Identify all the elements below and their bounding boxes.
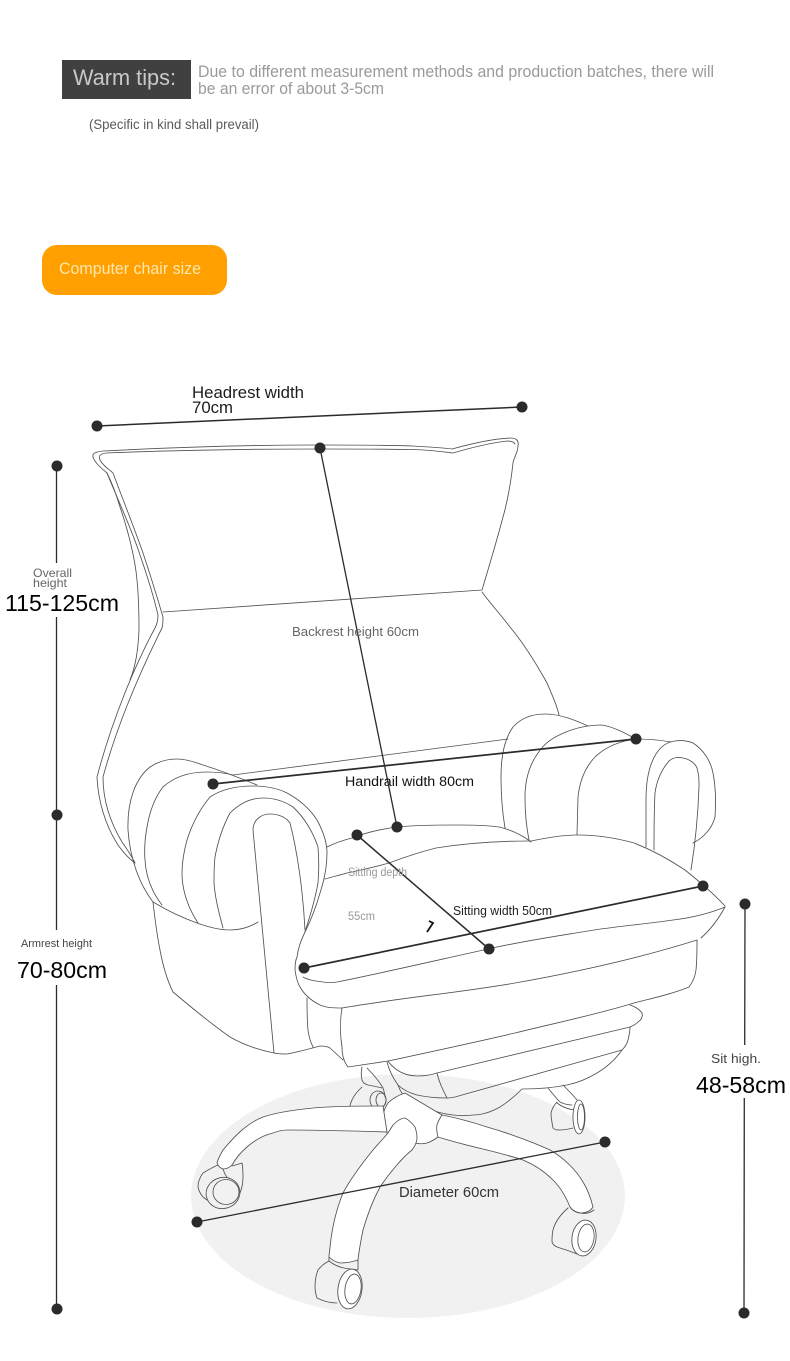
measure: sitting width: Sitting width 50cm bbox=[453, 904, 552, 918]
measure: overall height: 115-125cm bbox=[5, 590, 119, 616]
floor shadow ellipse bbox=[191, 1074, 625, 1318]
section pill: computer chair size bbox=[42, 245, 227, 295]
measure: handrail width bbox=[208, 734, 642, 790]
warm tips badge: Warm tips: bbox=[73, 65, 176, 90]
measure: backrest height: Backrest height 60cm bbox=[292, 625, 419, 639]
measure: overall height: height bbox=[33, 576, 68, 590]
measure: overall height: Overall bbox=[33, 566, 72, 580]
measure: armrest height: 70-80cm bbox=[17, 957, 107, 983]
warm tips note: be an error of about 3-5cm bbox=[198, 79, 384, 98]
measure: armrest height bbox=[17, 938, 107, 1314]
measure: headrest width: 70cm bbox=[192, 399, 233, 417]
measure: headrest width: Headrest width bbox=[192, 384, 304, 402]
measure: sitting depth: Sitting depth bbox=[348, 867, 407, 879]
measure: armrest height: Armrest height bbox=[21, 938, 92, 950]
section pill: computer chair size: Computer chair size bbox=[59, 259, 201, 278]
measure: seat height: 48-58cm bbox=[696, 1072, 786, 1098]
measure: sitting width bbox=[298, 880, 708, 974]
measure: sitting depth: 55cm bbox=[348, 911, 375, 923]
chair line drawing bbox=[93, 438, 725, 1310]
footrest bbox=[387, 1005, 642, 1116]
warm tips badge bbox=[62, 60, 191, 99]
back casters bbox=[350, 1067, 585, 1134]
measure: seat height: Sit high. bbox=[711, 1051, 761, 1066]
right armrest bbox=[501, 714, 716, 870]
measure: base diameter: Diameter 60cm bbox=[399, 1185, 499, 1201]
front casters bbox=[198, 1163, 598, 1310]
seat cushion bbox=[303, 825, 725, 1067]
measure: overall height bbox=[5, 460, 119, 930]
left armrest bbox=[128, 759, 343, 1060]
warm tips note: Due to different measurement methods and production batches, there will bbox=[198, 62, 714, 81]
measure: sitting depth bbox=[348, 830, 494, 954]
hub and base legs bbox=[217, 1093, 593, 1263]
chair backrest bbox=[93, 438, 559, 863]
measure: backrest height bbox=[292, 442, 419, 832]
warm tips note bbox=[198, 62, 714, 98]
measure: handrail width: Handrail width 80cm bbox=[345, 774, 474, 789]
specific in kind note: (Specific in kind shall prevail) bbox=[89, 117, 259, 132]
measure: base diameter bbox=[192, 1136, 610, 1228]
measure: seat height bbox=[696, 898, 786, 1318]
measure: headrest width bbox=[92, 384, 528, 432]
stray tick mark bbox=[427, 921, 433, 932]
